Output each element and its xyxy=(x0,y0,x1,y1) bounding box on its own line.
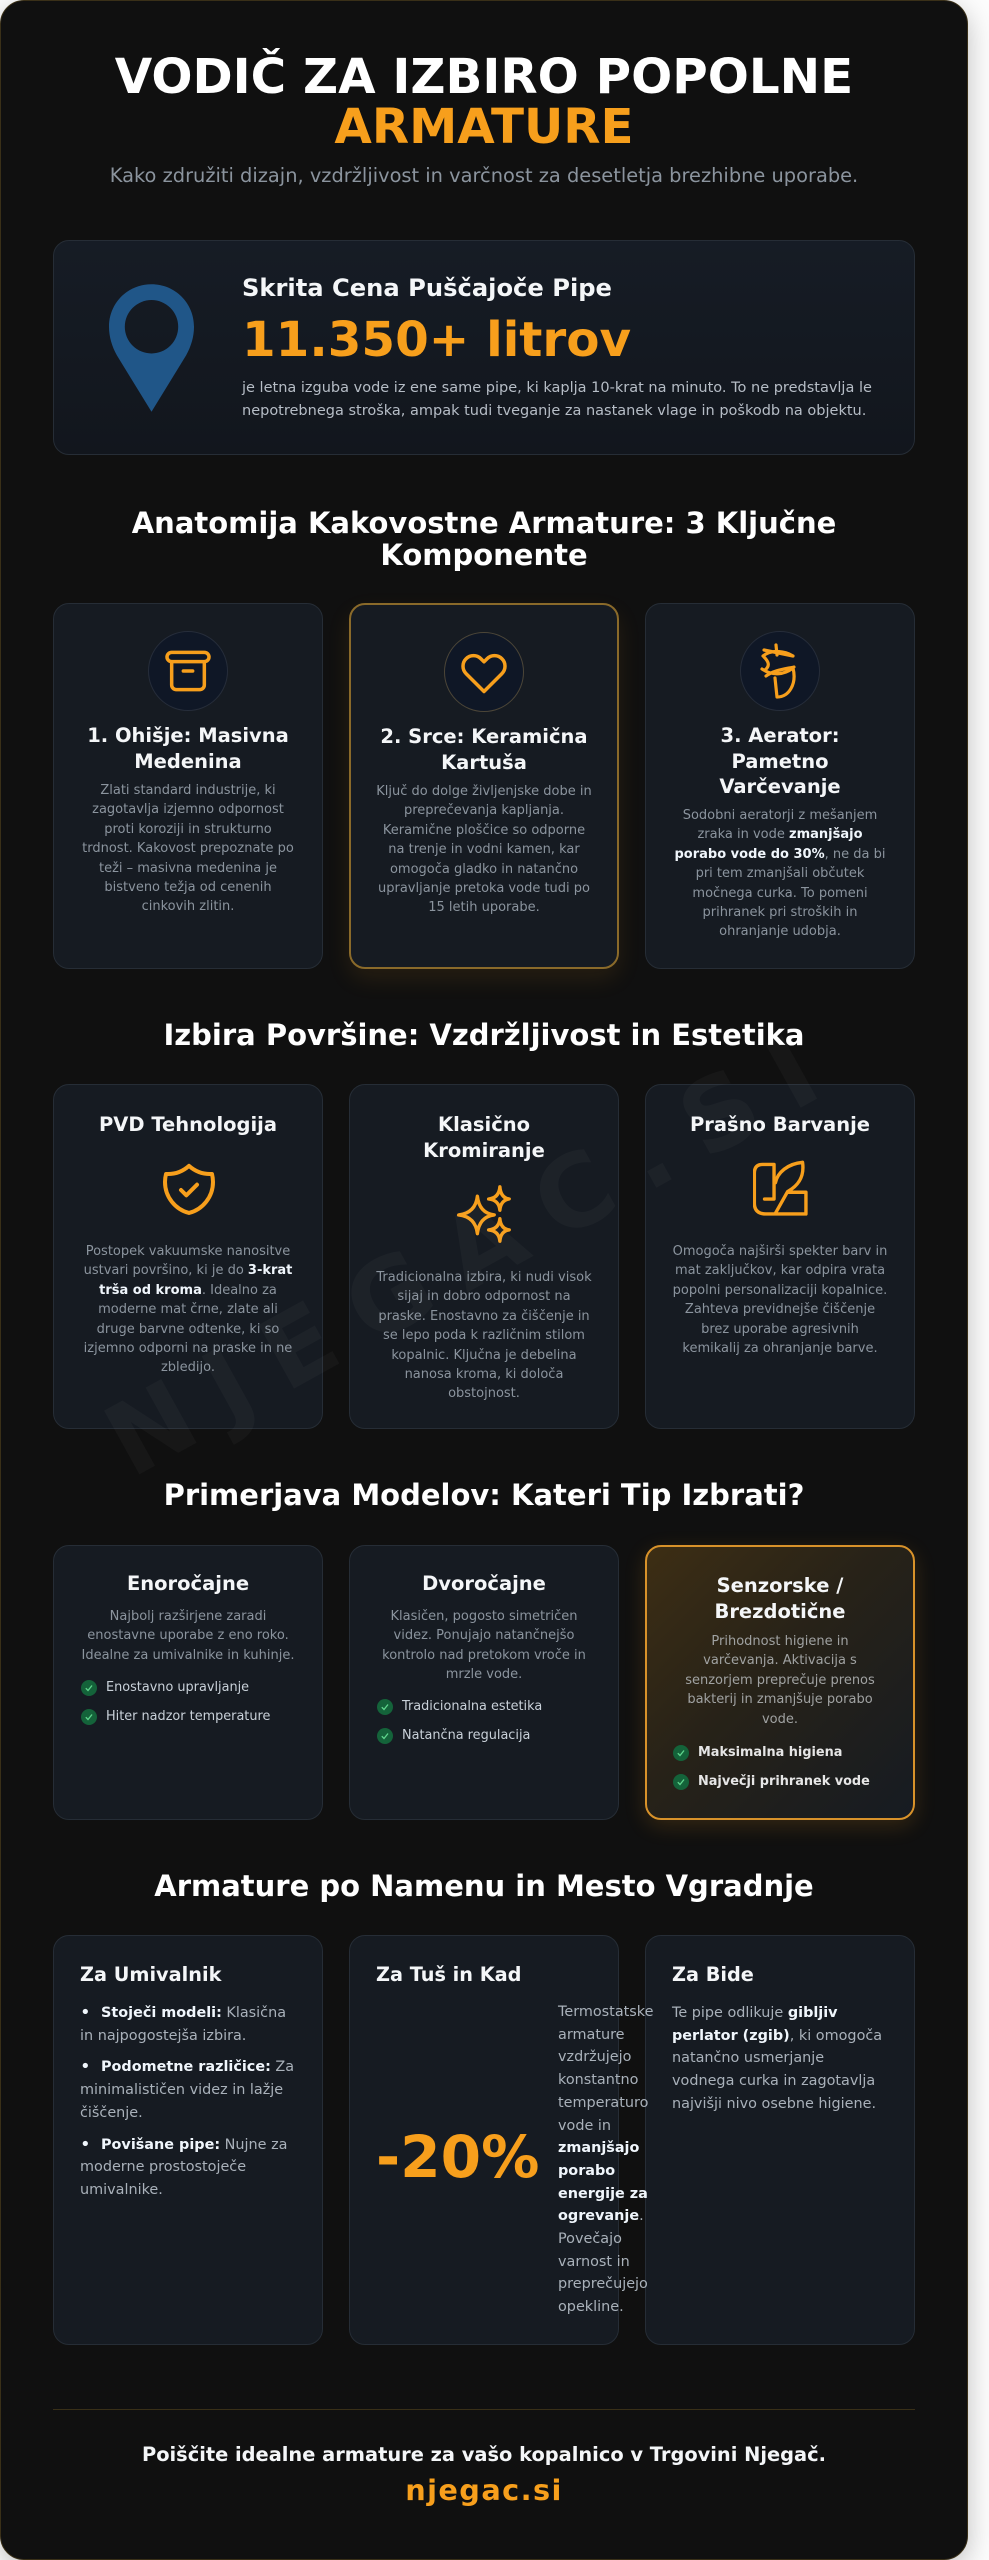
hero statistic: 11.350+ litrov xyxy=(242,312,631,368)
card text: Prihodnost higiene in xyxy=(711,1634,849,1649)
card text xyxy=(382,1609,586,1682)
card title: Kartuša xyxy=(441,751,527,774)
card title: Senzorske / xyxy=(717,1574,843,1597)
card title xyxy=(719,724,841,798)
card title: Klasično xyxy=(438,1113,530,1136)
card text: nanosa kroma, ki določa xyxy=(405,1367,563,1382)
shower text overflowing card: temperaturo xyxy=(558,2095,648,2111)
panel: aerator xyxy=(645,603,915,969)
card text: kemikalij za ohranjanje barve. xyxy=(682,1341,878,1356)
card text xyxy=(673,1244,887,1356)
card text: pri tem zmanjšali občutek xyxy=(696,866,864,881)
feature: aesthetics: Tradicionalna estetika xyxy=(402,1699,542,1714)
card title: 2. Srce: Keramična xyxy=(380,725,588,748)
footer call to action: Poiščite idealne armature za vašo kopalnico v Trgovini Njegač. xyxy=(142,2443,826,2466)
icon: box in circle xyxy=(148,631,228,711)
card text: zraka in vode zmanjšajo xyxy=(697,827,863,842)
hero text: nepotrebnega stroška, ampak tudi tveganje za nastanek vlage in poškodb na objektu. xyxy=(242,403,866,419)
shower text overflowing card: vzdržujejo xyxy=(558,2049,631,2065)
card title: Varčevanje xyxy=(719,775,841,798)
card title xyxy=(423,1113,545,1162)
card text: mat zaključkov, kar odpira vrata xyxy=(675,1263,885,1278)
shower text overflowing card: varnost in xyxy=(558,2254,630,2270)
card text: Idealne za umivalnike in kuhinje. xyxy=(82,1648,294,1663)
card text xyxy=(376,1270,592,1401)
shower text overflowing card: vode in xyxy=(558,2118,611,2134)
card text: zagotavlja izjemno odpornost xyxy=(92,802,284,817)
shower text overflowing card: konstantno xyxy=(558,2072,638,2088)
icon: quill on page xyxy=(753,1160,808,1216)
card title: Za Tuš in Kad xyxy=(376,1963,521,1986)
shower text overflowing card: opekline. xyxy=(558,2299,624,2315)
washbasin list: moderne prostostoječe xyxy=(80,2159,246,2175)
panel: ceramic cartridge xyxy=(349,603,619,969)
feature: water savings: Največji prihranek vode xyxy=(698,1774,870,1789)
card text: druge barvne odtenke, ki so xyxy=(97,1322,279,1337)
card text: obstojnost. xyxy=(448,1386,520,1401)
shower text overflowing card: preprečujejo xyxy=(558,2276,648,2292)
panel: single lever xyxy=(53,1545,323,1820)
shower text overflowing card xyxy=(558,2004,653,2315)
card text: bakterij in zmanjšuje porabo xyxy=(687,1692,873,1707)
card title: 3. Aerator: xyxy=(720,724,840,747)
card text: kontrolo nad pretokom vroče in xyxy=(382,1648,586,1663)
panel: chrome xyxy=(349,1084,619,1429)
shower text overflowing card: porabo xyxy=(558,2163,615,2179)
card title xyxy=(380,725,588,774)
card text: prihranek pri stroških in xyxy=(702,905,858,920)
subtitle: Kako združiti dizajn, vzdržljivost in varčnost za desetletja brezhibne uporabe. xyxy=(110,164,858,187)
section heading: anatomy: Anatomija Kakovostne Armature: 3 Ključne xyxy=(132,506,836,540)
panel: washbasin xyxy=(53,1935,323,2345)
card text: brez uporabe agresivnih xyxy=(701,1322,859,1337)
card text: omogoča gladko in natančno xyxy=(390,862,578,877)
card text: popolni personalizaciji kopalnice. xyxy=(673,1283,887,1298)
card text: preprečevanja kapljanja. xyxy=(404,803,564,818)
shower text overflowing card: ogrevanje. xyxy=(558,2208,644,2224)
card text: Klasičen, pogosto simetričen xyxy=(390,1609,578,1624)
card text xyxy=(82,783,294,914)
washbasin list: čiščenje. xyxy=(80,2105,143,2121)
icon: heart in circle xyxy=(444,632,524,712)
feature: hygiene: Maksimalna higiena xyxy=(698,1745,842,1760)
card title: Prašno Barvanje xyxy=(690,1113,870,1136)
card title: Medenina xyxy=(134,750,242,773)
panel: sensor touchless xyxy=(645,1545,915,1820)
hero text xyxy=(242,380,872,419)
section heading: models: Primerjava Modelov: Kateri Tip Izbrati? xyxy=(164,1478,804,1512)
card text: vode. xyxy=(762,1712,798,1727)
icon: map pin xyxy=(109,284,194,412)
bidet text: Te pipe odlikuje gibljiv xyxy=(672,2005,838,2021)
section heading: by purpose: Armature po Namenu in Mesto Vgradnje xyxy=(154,1869,814,1903)
card title xyxy=(714,1574,846,1623)
card title: Za Umivalnik xyxy=(80,1963,221,1986)
card text: močnega curka. To pomeni xyxy=(692,886,868,901)
card text: porabo vode do 30%, ne da bi xyxy=(674,847,885,862)
card text xyxy=(685,1634,875,1727)
hero text: je letna izguba vode iz ene same pipe, ki kaplja 10-krat na minuto. To ne predstavlja le xyxy=(242,380,872,396)
card text: cinkovih zlitin. xyxy=(142,899,234,914)
card text: teži – masivna medenina je xyxy=(99,861,277,876)
card text: trdnost. Kakovost prepoznate po xyxy=(82,841,294,856)
card text: mrzle vode. xyxy=(446,1667,522,1682)
card text: enostavne uporabe z eno roko. xyxy=(87,1628,289,1643)
bidet text: natančno usmerjanje xyxy=(672,2050,824,2066)
card text: videz. Ponujajo natančnejšo xyxy=(394,1628,574,1643)
icon: sparkles xyxy=(456,1185,511,1243)
section heading: anatomy xyxy=(132,506,836,572)
card text: ustvari površino, ki je do 3-krat xyxy=(84,1263,292,1278)
panel: hidden cost hero xyxy=(53,240,915,455)
card text: Zahteva previdnejše čiščenje xyxy=(685,1302,875,1317)
card text xyxy=(674,808,885,939)
title: ARMATURE xyxy=(334,98,634,154)
bidet text: perlator (zgib), ki omogoča xyxy=(672,2028,882,2044)
section heading: anatomy: Komponente xyxy=(380,538,588,572)
section heading: surfaces: Izbira Površine: Vzdržljivost in Estetika xyxy=(163,1018,804,1052)
card text: Keramične ploščice so odporne xyxy=(383,823,585,838)
washbasin list: Stoječi modeli: Klasična xyxy=(101,2005,286,2021)
panel: housing xyxy=(53,603,323,969)
card text xyxy=(82,1609,294,1663)
washbasin list: minimalističen videz in lažje xyxy=(80,2082,283,2098)
title: VODIČ ZA IZBIRO POPOLNE xyxy=(115,49,853,105)
card title: PVD Tehnologija xyxy=(99,1113,277,1136)
card text: sijaj in dobro odpornost na xyxy=(397,1289,571,1304)
card text: proti koroziji in strukturno xyxy=(104,822,272,837)
feature: temperature control: Hiter nadzor temperature xyxy=(106,1709,270,1724)
card title: Za Bide xyxy=(672,1963,754,1986)
card text: trša od kroma. Idealno za xyxy=(99,1283,277,1298)
title xyxy=(115,48,853,154)
card text: Postopek vakuumske nanositve xyxy=(86,1244,290,1259)
card text: Tradicionalna izbira, ki nudi visok xyxy=(376,1270,592,1285)
card text xyxy=(84,1244,292,1375)
shower text overflowing card: energije za xyxy=(558,2186,648,2202)
card title: Dvoročajne xyxy=(422,1572,546,1595)
card text: na trenje in vodni kamen, kar xyxy=(388,842,580,857)
panel: powder coating xyxy=(645,1084,915,1429)
washbasin list: • xyxy=(80,2056,91,2077)
card text: se lepo poda k različnim stilom xyxy=(383,1328,585,1343)
card text: Sodobni aeratorji z mešanjem xyxy=(683,808,877,823)
panel: PVD xyxy=(53,1084,323,1429)
card text: Zlati standard industrije, ki xyxy=(100,783,276,798)
card text: zbledijo. xyxy=(161,1360,215,1375)
washbasin list: • xyxy=(80,2134,91,2155)
bidet text xyxy=(672,2005,882,2112)
card text: varčevanja. Aktivacija s xyxy=(703,1653,857,1668)
feature: regulation: Natančna regulacija xyxy=(402,1728,530,1743)
feature: simple control: Enostavno upravljanje xyxy=(106,1680,249,1695)
bidet text: vodnega curka in zagotavlja xyxy=(672,2073,875,2089)
card text xyxy=(376,784,592,915)
statistic: -20% xyxy=(376,2123,539,2191)
panel: shower and bath xyxy=(349,1935,619,2345)
card text: 15 letih uporabe. xyxy=(428,900,540,915)
card text: moderne mat črne, zlate ali xyxy=(98,1302,278,1317)
card title: Brezdotične xyxy=(714,1600,846,1623)
card title: Pametno xyxy=(731,750,829,773)
watermark: NJEGAC.SI xyxy=(86,999,861,1500)
shower text overflowing card: Povečajo xyxy=(558,2231,622,2247)
washbasin list: umivalnike. xyxy=(80,2182,163,2198)
card text: Najbolj razširjene zaradi xyxy=(110,1609,266,1624)
card text: bistveno težja od cenenih xyxy=(104,880,272,895)
card text: kopalnic. Ključna je debelina xyxy=(391,1348,577,1363)
washbasin list: • xyxy=(80,2002,91,2023)
card text: Omogoča najširši spekter barv in xyxy=(673,1244,887,1259)
washbasin list: in najpogostejša izbira. xyxy=(80,2028,246,2044)
card text: praske. Enostavno za čiščenje in xyxy=(378,1309,590,1324)
footer brand link: njegac.si xyxy=(405,2473,563,2507)
shower text overflowing card: armature xyxy=(558,2027,625,2043)
card text: Ključ do dolge življenjske dobe in xyxy=(376,784,592,799)
card title: Kromiranje xyxy=(423,1139,545,1162)
icon: aerator in circle xyxy=(740,631,820,711)
card text: ohranjanje udobja. xyxy=(719,924,841,939)
washbasin list: Podometne različice: Za xyxy=(101,2059,294,2075)
card text: upravljanje pretoka vode tudi po xyxy=(378,881,590,896)
card title xyxy=(87,724,289,773)
panel: two handle xyxy=(349,1545,619,1820)
shower text overflowing card: Termostatske xyxy=(558,2004,653,2020)
footer divider xyxy=(53,2409,915,2410)
bidet text: najvišji nivo osebne higiene. xyxy=(672,2096,876,2112)
panel: bidet xyxy=(645,1935,915,2345)
icon: shield check xyxy=(163,1164,215,1215)
card title: Enoročajne xyxy=(127,1572,249,1595)
card title: 1. Ohišje: Masivna xyxy=(87,724,289,747)
card text: senzorjem preprečuje prenos xyxy=(685,1673,875,1688)
shower text overflowing card: zmanjšajo xyxy=(558,2140,639,2156)
washbasin list: Povišane pipe: Nujne za xyxy=(101,2137,287,2153)
card text: izjemno odporni na praske in ne xyxy=(84,1341,292,1356)
washbasin list xyxy=(80,2002,294,2198)
hero heading: Skrita Cena Puščajoče Pipe xyxy=(242,274,612,302)
